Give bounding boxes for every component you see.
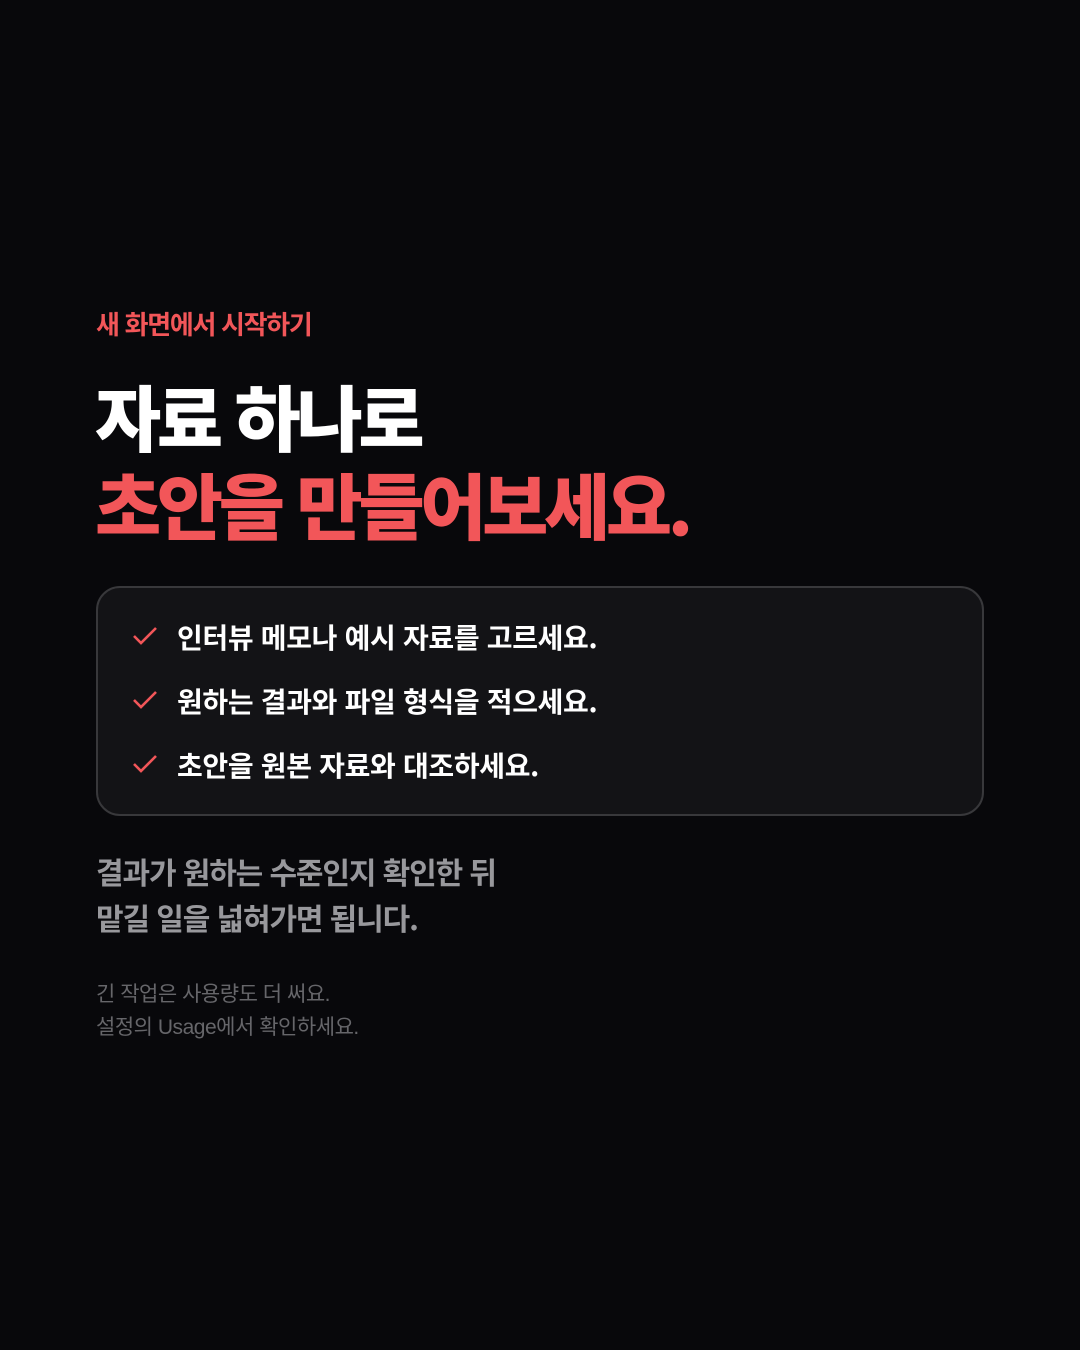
supporting text xyxy=(96,849,496,939)
icon: check 2 xyxy=(133,691,157,709)
icon: check 3 xyxy=(133,755,157,773)
item 3: 초안을 원본 자료와 대조하세요. xyxy=(177,745,539,785)
footnote xyxy=(96,983,359,1039)
title: 자료 하나로 xyxy=(95,362,420,467)
panel: checklist xyxy=(96,586,984,816)
icon: check 1 xyxy=(133,627,157,645)
eyebrow label: 새 화면에서 시작하기 xyxy=(96,305,312,342)
item 1: 인터뷰 메모나 예시 자료를 고르세요. xyxy=(177,617,597,657)
footnote: 설정의 Usage에서 확인하세요. xyxy=(96,1016,359,1039)
item 2: 원하는 결과와 파일 형식을 적으세요. xyxy=(177,681,597,721)
supporting text: 결과가 원하는 수준인지 확인한 뒤 xyxy=(96,849,496,893)
supporting text: 맡길 일을 넓혀가면 됩니다. xyxy=(96,895,418,939)
footnote: 긴 작업은 사용량도 더 써요. xyxy=(96,983,330,1006)
title xyxy=(95,362,689,555)
title: 초안을 만들어보세요. xyxy=(95,450,689,555)
